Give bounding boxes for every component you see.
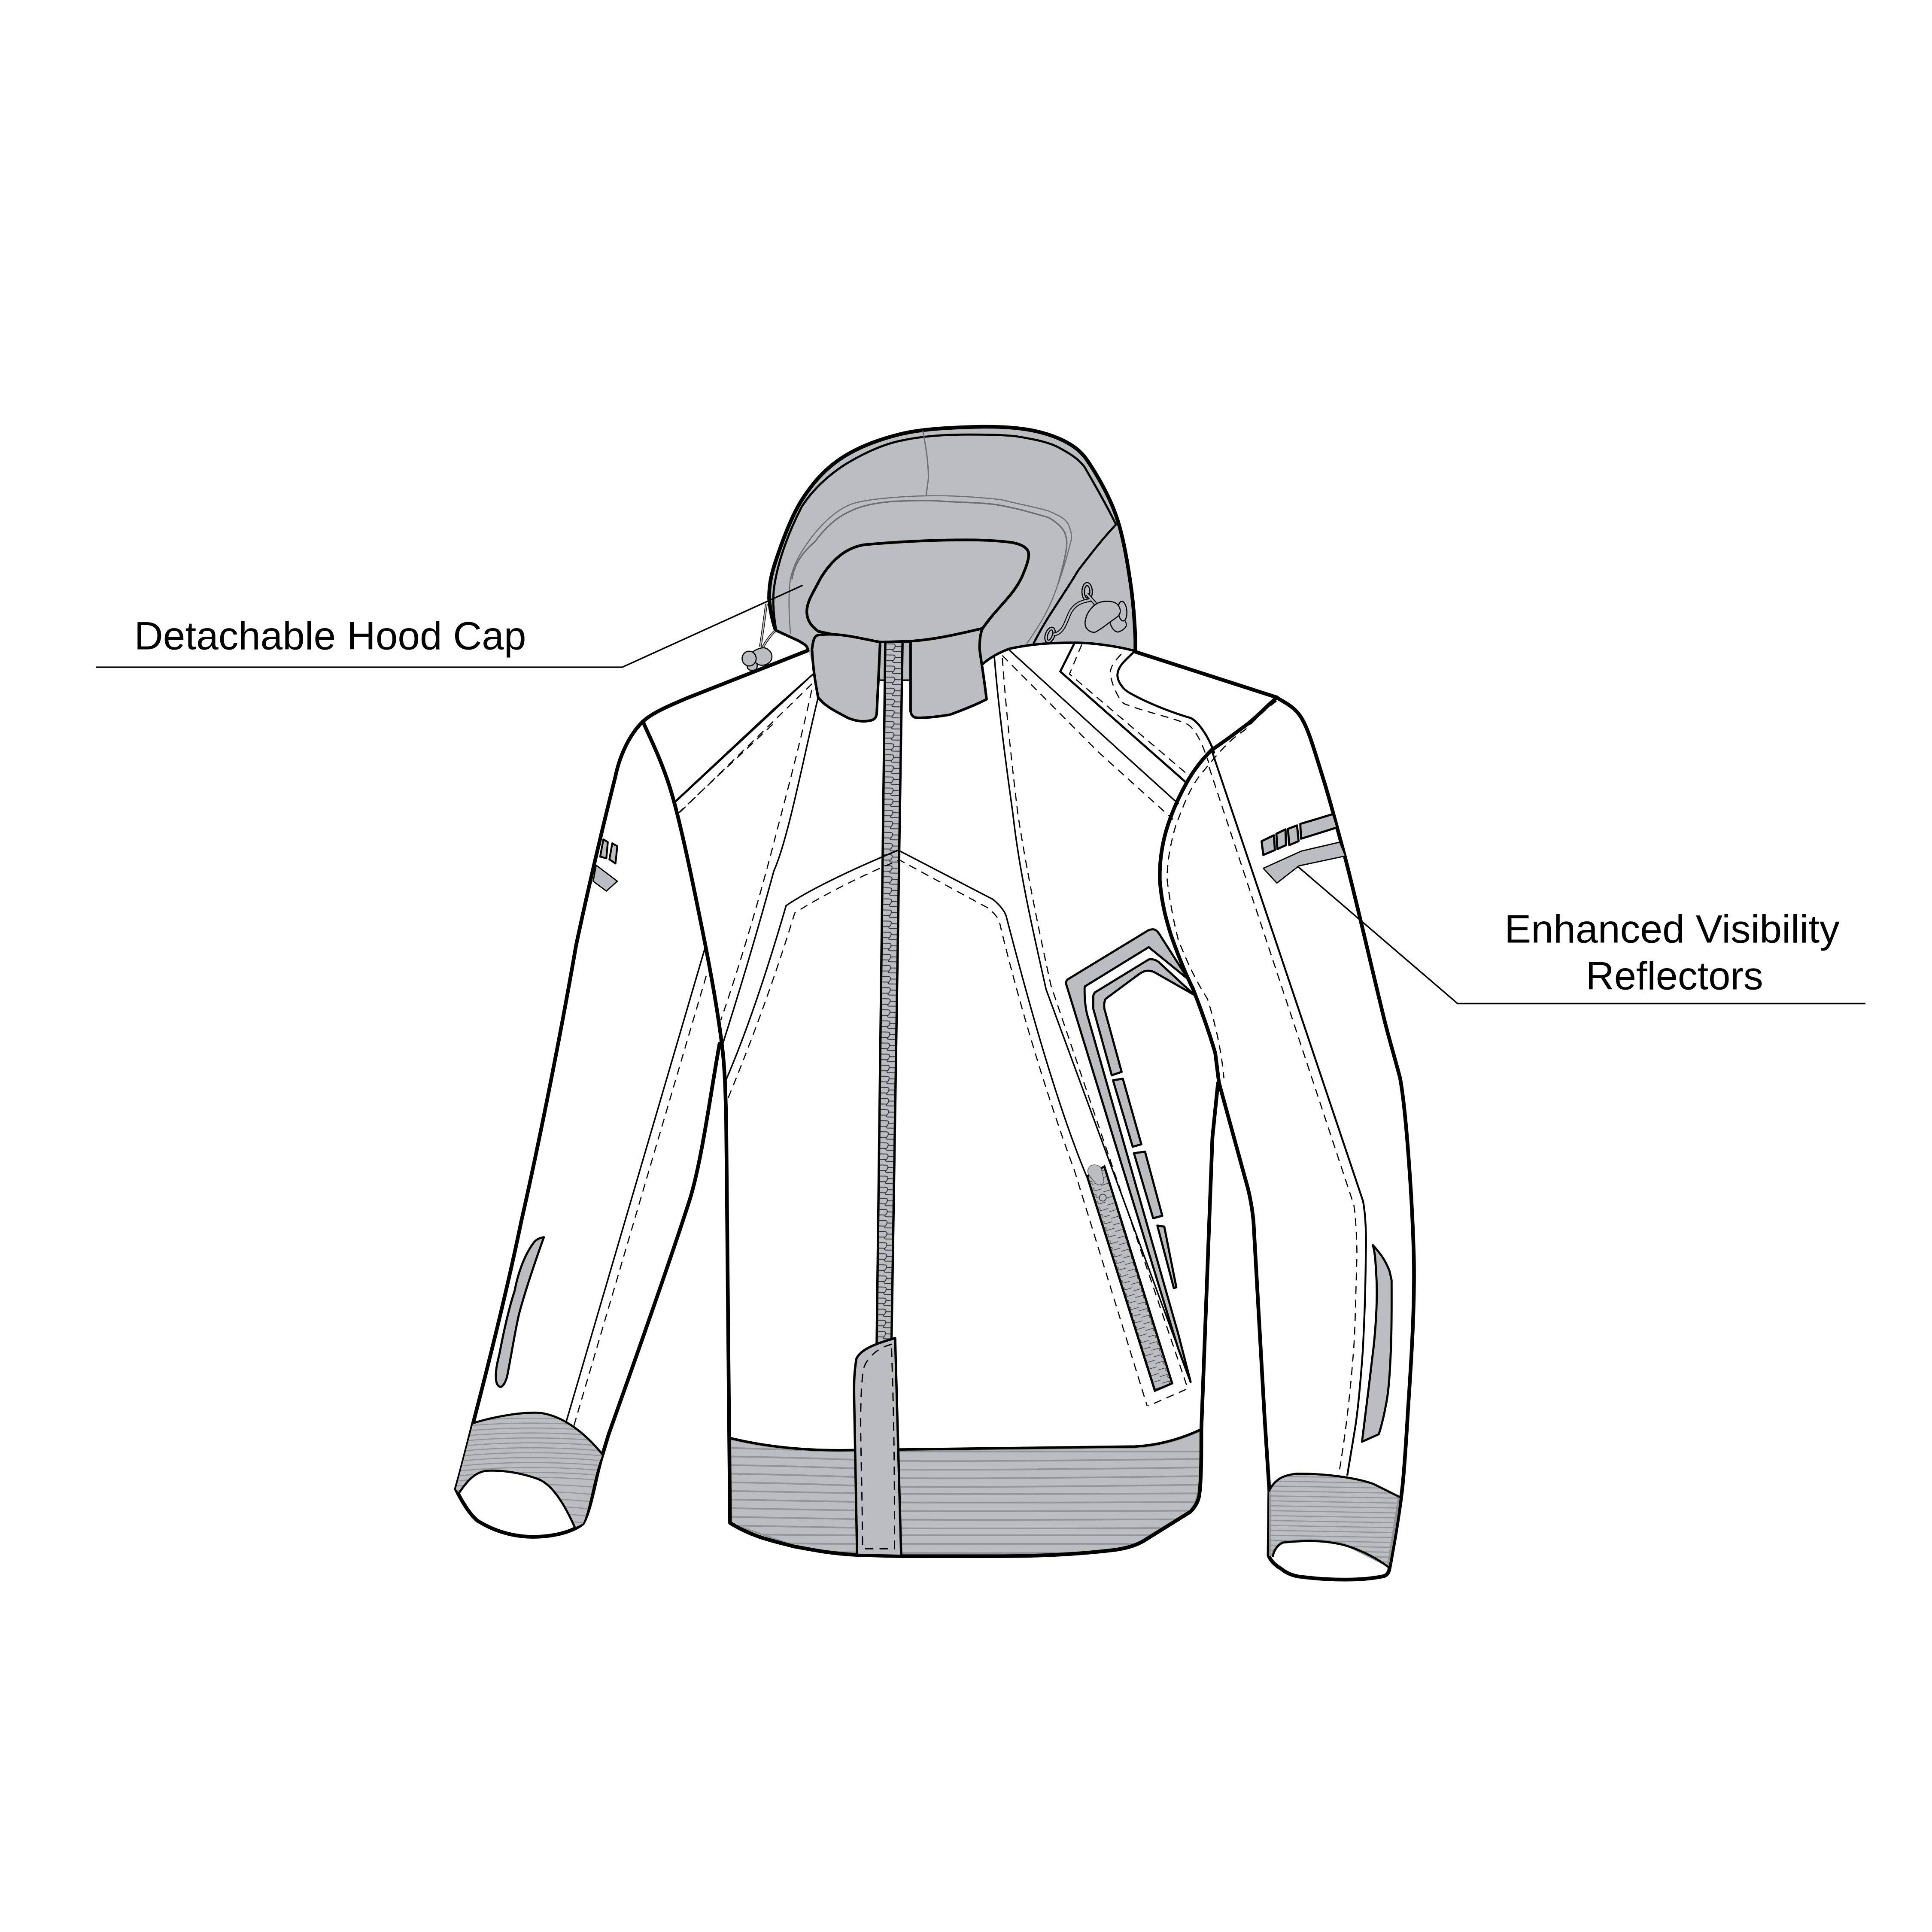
hood toggle left <box>742 604 775 670</box>
main zipper <box>877 642 902 1346</box>
left sleeve reflectors <box>593 839 617 891</box>
right sleeve reflectors <box>1261 814 1346 883</box>
right cuff <box>1267 1473 1405 1567</box>
left sleeve panel seams <box>566 949 705 1422</box>
left chest seams <box>675 674 818 1046</box>
left cuff <box>456 1413 610 1528</box>
hood opening panel <box>807 540 1029 642</box>
body side and hem outline <box>726 1083 1218 1556</box>
chest reflector <box>1066 930 1194 1382</box>
hood <box>769 427 1136 667</box>
hood toggle right <box>1043 583 1127 644</box>
label: reflectors: Enhanced Visibility <box>1504 907 1840 951</box>
callout: detachable hood cap <box>96 585 803 667</box>
left sleeve <box>456 650 813 1537</box>
right sleeve lower reflector <box>1362 1245 1391 1442</box>
jacket illustration <box>456 427 1414 1580</box>
callout: enhanced visibility reflectors <box>1297 866 1865 1004</box>
collar left <box>812 634 880 721</box>
leader line: hood cap <box>96 585 803 667</box>
left sleeve lower reflector <box>496 1237 544 1387</box>
label: reflectors: Reflectors <box>1586 954 1763 998</box>
front hem <box>727 1429 1201 1556</box>
collar right <box>911 629 987 718</box>
front body panel <box>675 642 1218 1556</box>
left shoulder panel <box>674 674 813 814</box>
neck shoulder panel <box>1060 643 1214 782</box>
leader line: reflectors <box>1297 866 1865 1004</box>
collar behind <box>877 642 913 680</box>
label: hood cap: Detachable Hood Cap <box>134 614 526 658</box>
right sleeve <box>1136 652 1414 1580</box>
centre chest panel <box>726 850 1147 1406</box>
right chest seams <box>994 650 1190 1406</box>
right sleeve panel seams <box>1167 701 1366 1476</box>
front placket <box>854 1338 901 1556</box>
pocket zipper <box>1087 1165 1172 1391</box>
